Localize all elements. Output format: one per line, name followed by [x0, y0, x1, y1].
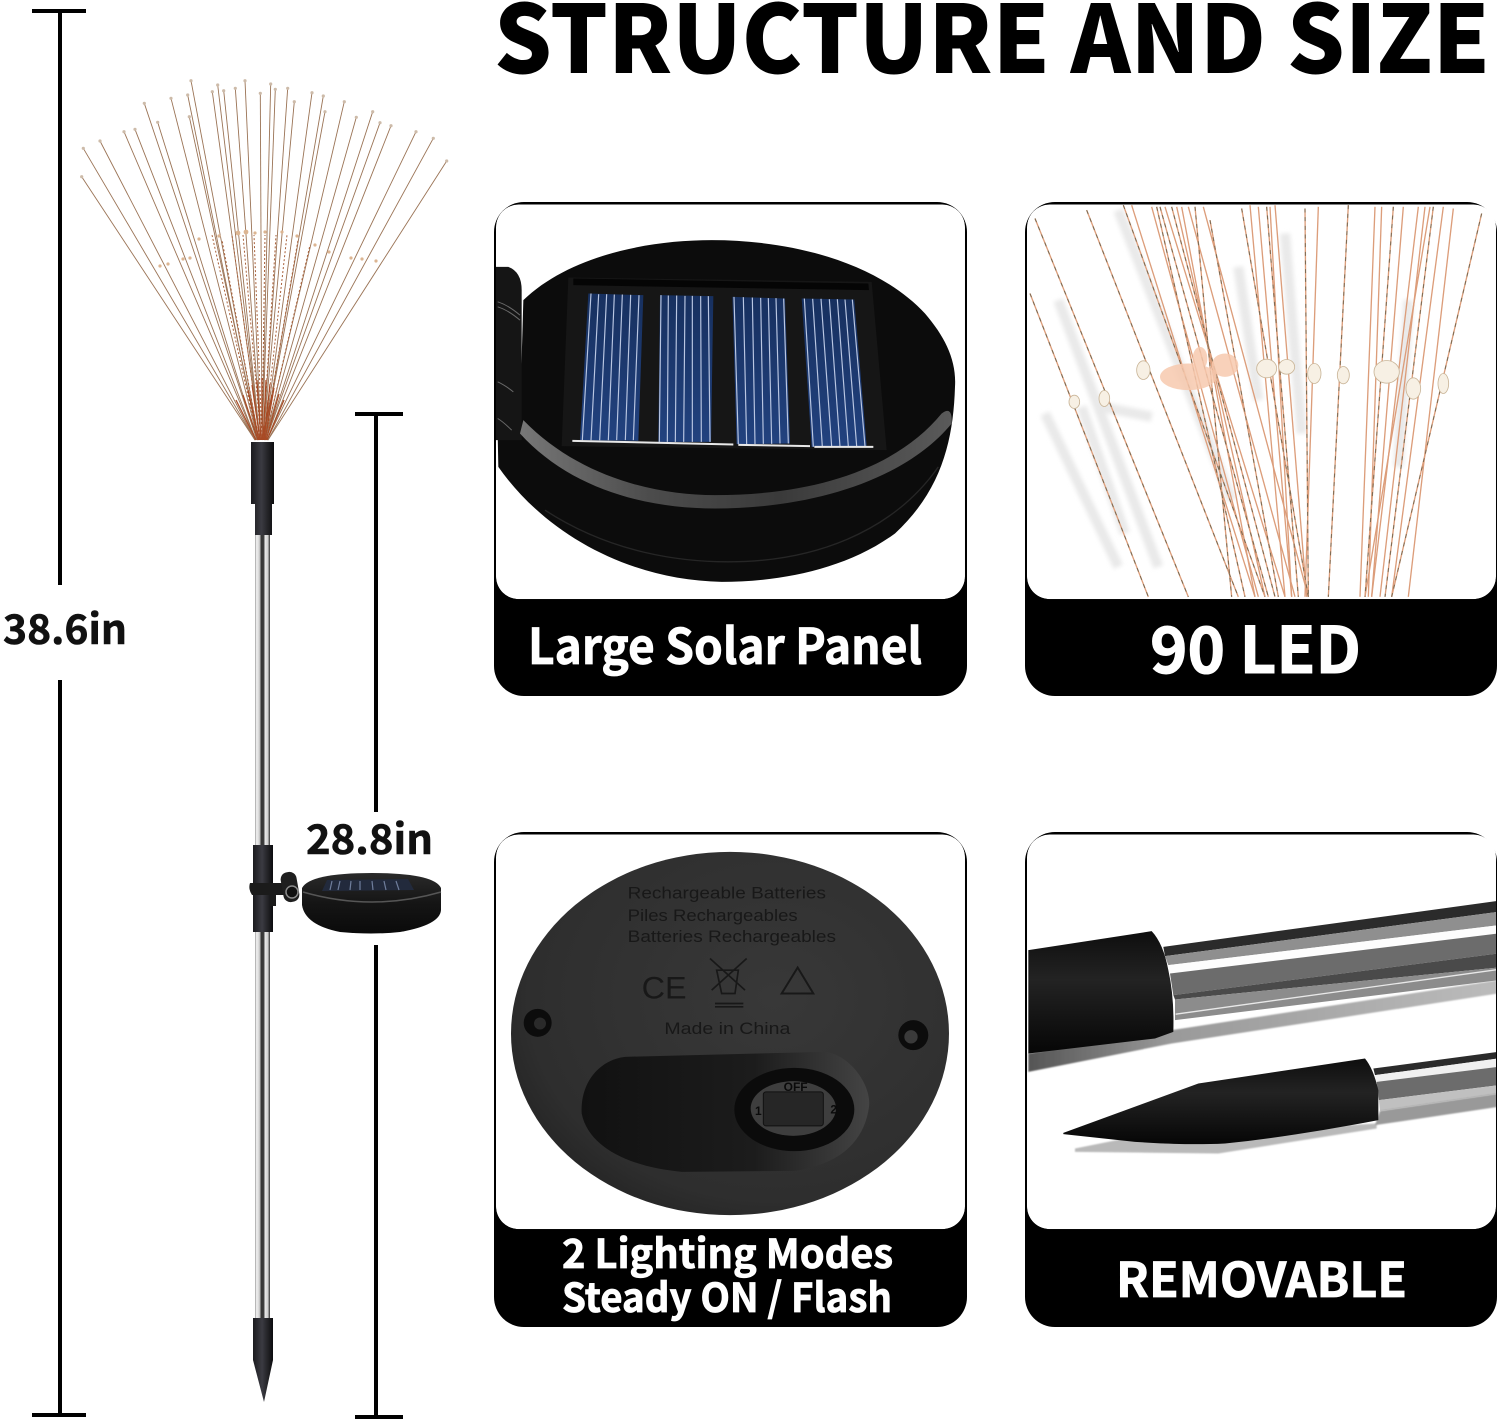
left screw — [524, 1009, 552, 1037]
switch labels: 2 — [830, 1102, 837, 1116]
switch labels — [756, 1082, 836, 1115]
recess shadow — [573, 278, 869, 290]
top black sleeve — [251, 442, 274, 535]
solar disc body — [302, 873, 441, 934]
solar cell 4 — [802, 298, 867, 447]
panel: 90 LED — [1025, 202, 1497, 696]
panel frame — [1025, 832, 1497, 1327]
product: firework solar stake light — [80, 79, 448, 1402]
housing seam — [545, 467, 938, 562]
panel: removable — [1025, 832, 1498, 1327]
upper tube — [1163, 901, 1498, 1020]
hinge knob — [280, 871, 300, 903]
lower tube — [255, 930, 270, 1322]
panel photo: solar panel — [495, 204, 965, 599]
wire dotted copper center — [212, 235, 310, 440]
caption: Large Solar Panel — [528, 608, 922, 679]
clamp band — [249, 878, 296, 906]
solar cells — [322, 879, 414, 891]
solar cell 3 — [732, 297, 790, 444]
spike shadow — [1075, 1123, 1377, 1153]
label: 38.6in: 38.6in — [3, 596, 127, 656]
switch surround — [734, 1068, 854, 1151]
moulded text — [628, 883, 836, 1038]
panel: 2 lighting modes — [494, 832, 967, 1327]
hinge — [495, 267, 522, 440]
label: 28.8in: 28.8in — [306, 806, 433, 866]
solar cell 1 — [580, 293, 643, 441]
panel recess — [562, 277, 887, 450]
upper black sleeve — [1028, 931, 1173, 1053]
moulded text: CE — [642, 969, 687, 1005]
housing body — [498, 240, 955, 582]
panel frame — [494, 202, 967, 696]
wire copper core near base — [236, 378, 284, 440]
clamp sleeve — [253, 845, 273, 932]
switch labels: OFF — [784, 1080, 808, 1094]
housing underside — [511, 852, 949, 1215]
LED beads — [1069, 359, 1449, 408]
panel frame — [1025, 202, 1497, 696]
moulded text: Batteries Rechargeables — [628, 927, 836, 946]
copper wires — [1030, 205, 1482, 597]
cell bus bar — [572, 441, 873, 447]
solar unit on clamp — [249, 871, 441, 934]
pointed ground spike — [253, 1318, 273, 1402]
moulded text: Made in China — [664, 1019, 791, 1038]
panel frame — [494, 832, 967, 1327]
panel photo: stake sections — [1027, 834, 1498, 1229]
upper tube shadow — [1028, 980, 1498, 1072]
mid-wire beads — [158, 230, 378, 268]
caption: 90 LED — [1150, 600, 1361, 692]
bevel highlight ring — [520, 411, 952, 508]
solar cell 2 — [658, 295, 713, 442]
caption: REMOVABLE — [1116, 1241, 1407, 1311]
panel: large solar panel — [494, 202, 967, 696]
moulded text: Rechargeable Batteries — [628, 883, 826, 902]
dimension: total height 38.6in — [3, 11, 127, 1415]
switch labels: 1 — [755, 1104, 762, 1118]
pointed black sleeve — [1063, 1058, 1378, 1144]
right screw — [898, 1020, 928, 1050]
moulded text: Piles Rechargeables — [628, 906, 798, 925]
caption line 1: 2 Lighting Modes — [562, 1222, 893, 1280]
switch recess — [582, 1052, 869, 1172]
bin symbol — [710, 958, 747, 1007]
switch slider — [763, 1092, 823, 1126]
panel photo: LED wires — [1027, 204, 1496, 599]
switch well — [751, 1081, 836, 1136]
dark twist on wires — [1030, 205, 1482, 597]
recycle symbol — [782, 967, 813, 993]
hinge highlights — [498, 302, 520, 430]
upper tube — [255, 533, 270, 847]
firework wires — [82, 81, 447, 440]
LED bead cluster — [1160, 347, 1238, 390]
caption — [562, 1222, 893, 1324]
soft shadows — [1045, 210, 1408, 567]
caption line 2: Steady ON / Flash — [562, 1266, 892, 1324]
panel photo: underside with switch — [496, 834, 965, 1229]
LED beads at wire tips — [80, 79, 448, 178]
lower tube — [1373, 1052, 1498, 1125]
disc rim highlight — [303, 892, 441, 902]
dimension: stake height 28.8in — [306, 414, 433, 1417]
